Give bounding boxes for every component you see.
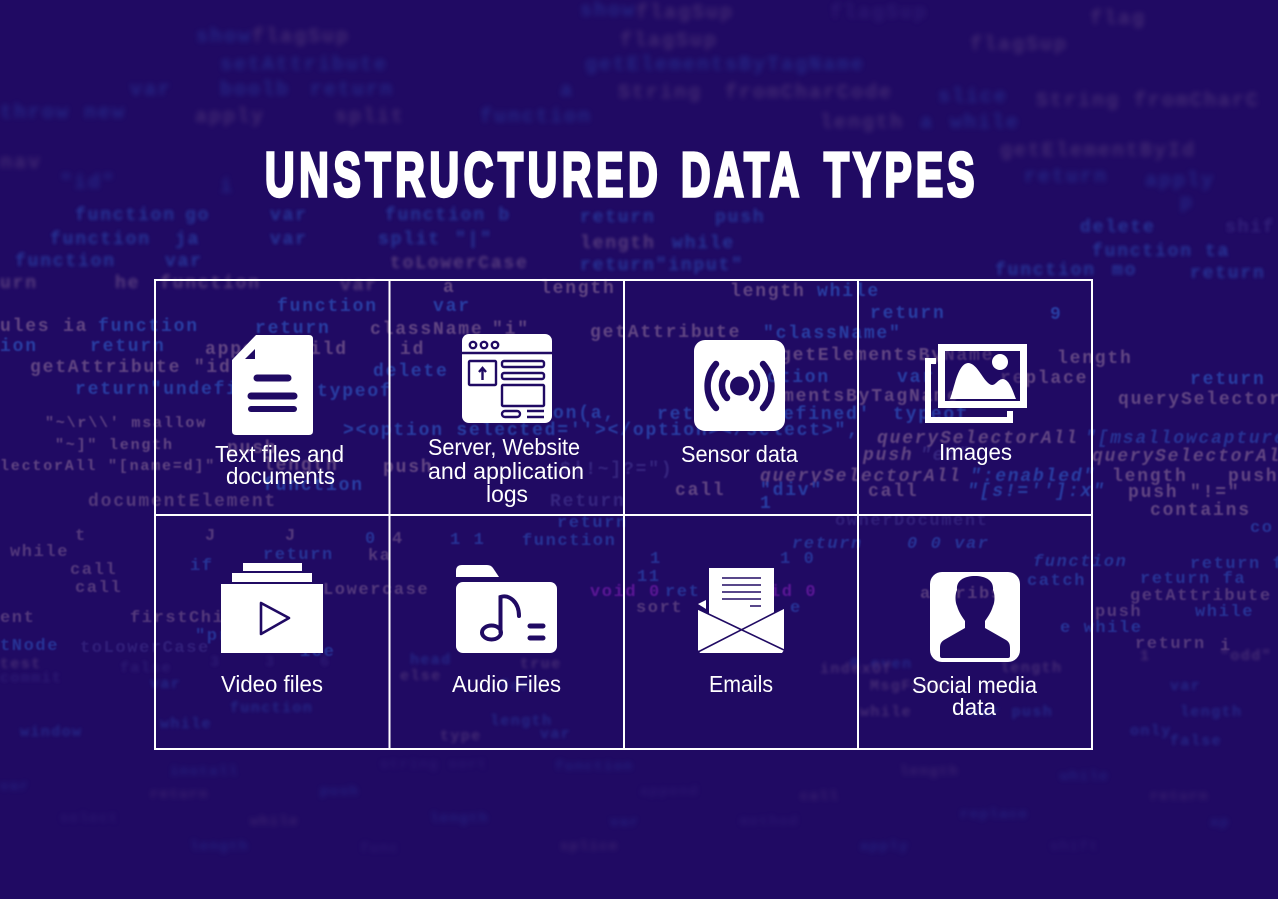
background: blurred programming code on deep purple: true <box>520 656 562 673</box>
background: blurred programming code on deep purple: var <box>540 726 571 743</box>
background: blurred programming code on deep purple: shift <box>1050 839 1099 855</box>
background: blurred programming code on deep purple: flagSup <box>636 2 734 25</box>
background: blurred programming code on deep purple: 1 0 <box>780 550 815 569</box>
background: blurred programming code on deep purple: ><option selected=''></option></select>", <box>343 421 860 441</box>
background: blurred programming code on deep purple: return <box>557 514 628 533</box>
background: blurred programming code on deep purple: function <box>1092 242 1193 262</box>
background: blurred programming code on deep purple: id <box>400 340 425 360</box>
background: blurred programming code on deep purple: return <box>310 79 394 102</box>
background: blurred programming code on deep purple: className <box>370 320 483 340</box>
background: blurred programming code on deep purple: indexOf <box>820 661 893 678</box>
background: blurred programming code on deep purple: ownerDocument <box>835 512 988 531</box>
background: blurred programming code on deep purple: a <box>920 112 934 135</box>
background: blurred programming code on deep purple: 6 <box>320 654 330 671</box>
background: blurred programming code on deep purple: delete <box>373 362 449 382</box>
background: blurred programming code on deep purple: getElementsByName <box>780 346 994 366</box>
background: blurred programming code on deep purple: var <box>1170 678 1201 695</box>
background: blurred programming code on deep purple: function <box>995 261 1096 281</box>
background: blurred programming code on deep purple: "odd" <box>1220 648 1272 665</box>
background: blurred programming code on deep purple: while <box>860 704 912 721</box>
background: blurred programming code on deep purple: false <box>120 660 172 677</box>
background: blurred programming code on deep purple: return"undefi <box>75 380 239 400</box>
background: blurred programming code on deep purple: call <box>800 789 839 805</box>
background: blurred programming code on deep purple: call <box>75 579 122 598</box>
title: UNSTRUCTURED <box>265 141 658 210</box>
cell: sensor data <box>681 340 798 467</box>
background: blurred programming code on deep purple: "id" <box>60 172 116 195</box>
background: blurred programming code on deep purple: ent <box>0 609 35 628</box>
background: blurred programming code on deep purple: push <box>1128 483 1178 503</box>
background: blurred programming code on deep purple: function b <box>385 206 511 226</box>
background: blurred programming code on deep purple: firstChi <box>130 609 224 628</box>
background: blurred programming code on deep purple: return <box>255 319 331 339</box>
background: blurred programming code on deep purple: contains <box>1150 501 1251 521</box>
background: blurred programming code on deep purple: getAttribute <box>590 323 741 343</box>
background: blurred programming code on deep purple: while <box>1060 769 1109 785</box>
background: blurred programming code on deep purple: Return <box>550 492 626 512</box>
background: blurred programming code on deep purple: on(a, <box>553 404 616 424</box>
background: blurred programming code on deep purple: while <box>10 543 69 562</box>
background: blurred programming code on deep purple: i <box>220 176 234 199</box>
background: blurred programming code on deep purple: function <box>555 759 633 775</box>
background: blurred programming code on deep purple: var <box>150 676 181 693</box>
background: blurred programming code on deep purple: length <box>580 234 656 254</box>
title: TYPES <box>824 141 974 210</box>
background: blurred programming code on deep purple: flag <box>1090 8 1146 31</box>
background: blurred programming code on deep purple: ja <box>175 230 200 250</box>
background: blurred programming code on deep purple: "ed" <box>920 446 970 466</box>
grid of eight data types <box>155 280 1092 749</box>
icon: video folder <box>221 563 323 653</box>
background: blurred programming code on deep purple: func <box>360 841 399 857</box>
background: blurred programming code on deep purple: ion <box>0 337 38 357</box>
background: blurred programming code on deep purple: ret <box>657 405 695 425</box>
background: blurred programming code on deep purple: return <box>580 208 656 228</box>
background: blurred programming code on deep purple: function <box>522 532 616 551</box>
background: blurred programming code on deep purple: go <box>185 206 210 226</box>
background: blurred programming code on deep purple: getAttribute "id" <box>30 358 244 378</box>
label <box>428 434 584 507</box>
cell: audio files <box>452 565 561 697</box>
background: blurred programming code on deep purple: function <box>1033 553 1127 572</box>
background: blurred programming code on deep purple: length <box>540 279 616 299</box>
background: blurred programming code on deep purple: 0 0 var <box>907 535 990 554</box>
background: blurred programming code on deep purple: getElementsByTagName <box>585 54 865 77</box>
label: and application <box>428 458 584 484</box>
background: blurred programming code on deep purple: push <box>227 439 277 459</box>
background: blurred programming code on deep purple: length <box>820 112 904 135</box>
background: blurred programming code on deep purple: false <box>1170 733 1222 750</box>
label: documents <box>226 463 335 489</box>
background: blurred programming code on deep purple: ules ia <box>0 317 88 337</box>
background: blurred programming code on deep purple: length <box>1180 704 1242 721</box>
background: blurred programming code on deep purple: String fromCharC <box>1036 90 1260 113</box>
background: blurred programming code on deep purple: mentsByTagName <box>783 387 959 407</box>
background: blurred programming code on deep purple: return <box>1190 370 1266 390</box>
background: blurred programming code on deep purple: getAttribute <box>1130 587 1272 606</box>
background: blurred programming code on deep purple: var <box>165 252 203 272</box>
background: blurred programming code on deep purple: var push <box>970 704 1053 721</box>
background: blurred programming code on deep purple: co <box>1250 519 1274 538</box>
background: blurred programming code on deep purple: string sort <box>380 757 488 773</box>
background: blurred programming code on deep purple: i <box>1220 637 1232 656</box>
background: blurred programming code on deep purple: length <box>1000 660 1062 677</box>
title: DATA <box>681 141 799 210</box>
background: blurred programming code on deep purple: return <box>870 304 946 324</box>
background: blurred programming code on deep purple: return <box>150 787 209 803</box>
background: blurred programming code on deep purple: querySelectorAll <box>877 429 1079 449</box>
background: blurred programming code on deep purple: toLowerCase <box>80 639 210 658</box>
background: blurred programming code on deep purple: push <box>1095 603 1142 622</box>
background: blurred programming code on deep purple: ret <box>665 583 700 602</box>
background: blurred programming code on deep purple: ild <box>310 340 348 360</box>
background: blurred programming code on deep purple: shif <box>1225 218 1275 238</box>
background: blurred programming code on deep purple: var <box>433 297 471 317</box>
background: blurred programming code on deep purple: return <box>1150 789 1209 805</box>
background: blurred programming code on deep purple: flagSup <box>830 2 928 25</box>
background: blurred programming code on deep purple: length <box>490 713 552 730</box>
background: blurred programming code on deep purple: commit <box>0 670 62 687</box>
background: blurred programming code on deep purple: length <box>263 456 339 476</box>
background: blurred programming code on deep purple: push <box>383 458 433 478</box>
label: Emails <box>709 671 773 697</box>
background: blurred programming code on deep purple: return <box>263 546 334 565</box>
background: blurred programming code on deep purple: var <box>897 368 935 388</box>
background: blurred programming code on deep purple: return <box>792 535 863 554</box>
background: blurred programming code on deep purple: function <box>50 230 151 250</box>
cell: images <box>928 348 1024 465</box>
background: blurred programming code on deep purple: return <box>1024 166 1108 189</box>
background: blurred programming code on deep purple: while <box>1195 603 1254 622</box>
background: blurred programming code on deep purple: call <box>675 481 725 501</box>
background: blurred programming code on deep purple: show <box>196 26 252 49</box>
background: blurred programming code on deep purple: ction <box>767 368 830 388</box>
cell: emails <box>698 568 784 697</box>
background: blurred programming code on deep purple: append <box>640 784 699 800</box>
background: blurred programming code on deep purple: push <box>862 446 913 466</box>
background: blurred programming code on deep purple: "[s!='']:x" <box>967 482 1106 502</box>
background: blurred programming code on deep purple: "pr" <box>195 627 242 646</box>
background: blurred programming code on deep purple: push <box>320 784 359 800</box>
background: blurred programming code on deep purple: ap <box>1210 815 1230 831</box>
background: blurred programming code on deep purple: getElementById <box>1000 140 1196 163</box>
background: blurred programming code on deep purple: J <box>205 527 217 546</box>
background: blurred programming code on deep purple: for <box>500 678 531 695</box>
background: blurred programming code on deep purple: length <box>190 839 249 855</box>
background: blurred programming code on deep purple: call <box>70 561 117 580</box>
background: blurred programming code on deep purple: mo <box>1112 261 1137 281</box>
background: blurred programming code on deep purple: he <box>115 274 140 294</box>
background: blurred programming code on deep purple: fromCharCode <box>725 82 893 105</box>
label <box>215 441 344 489</box>
icon: browser window <box>462 334 552 423</box>
background: blurred programming code on deep purple: 4 <box>392 530 404 549</box>
icon: music folder <box>456 565 557 653</box>
background: blurred programming code on deep purple: head <box>410 652 452 669</box>
icon: person portrait <box>930 572 1020 662</box>
background: blurred programming code on deep purple: urn <box>0 274 38 294</box>
background: blurred programming code on deep purple: replace <box>960 807 1029 823</box>
label: Social media <box>912 672 1037 698</box>
background: blurred programming code on deep purple: show <box>580 0 636 23</box>
background: blurred programming code on deep purple: call <box>868 482 918 502</box>
background: blurred programming code on deep purple: t <box>75 527 87 546</box>
background: blurred programming code on deep purple: flagSup <box>620 30 718 53</box>
background: blurred programming code on deep purple: return <box>90 337 166 357</box>
cell: social media data <box>912 572 1037 720</box>
background: blurred programming code on deep purple: apply <box>1145 170 1215 193</box>
label: Video files <box>221 671 323 697</box>
background: blurred programming code on deep purple: function <box>160 274 261 294</box>
background: blurred programming code on deep purple: efined' <box>783 405 871 425</box>
background: blurred programming code on deep purple: var <box>0 779 29 795</box>
background: blurred programming code on deep purple: while <box>817 282 880 302</box>
background: blurred programming code on deep purple: function <box>263 476 364 496</box>
title <box>265 141 974 210</box>
background: blurred programming code on deep purple: length <box>900 764 959 780</box>
background: blurred programming code on deep purple: a <box>443 278 456 298</box>
background: blurred programming code on deep purple: "~\r\\' msallow <box>45 415 207 432</box>
background: blurred programming code on deep purple: install <box>170 764 239 780</box>
background: blurred programming code on deep purple: nav <box>0 152 42 175</box>
background: blurred programming code on deep purple: function <box>480 106 592 129</box>
background: blurred programming code on deep purple: length <box>1112 467 1188 487</box>
background: blurred programming code on deep purple: return"input" <box>580 256 744 276</box>
background: blurred programming code on deep purple: typeof <box>317 382 393 402</box>
background: blurred programming code on deep purple: e while <box>1060 619 1143 638</box>
background: blurred programming code on deep purple: append <box>205 340 281 360</box>
background: blurred programming code on deep purple: test <box>0 656 42 673</box>
background: blurred programming code on deep purple: MsgFormat <box>870 678 964 695</box>
background: blurred programming code on deep purple: throw new <box>0 102 126 125</box>
background: blurred programming code on deep purple: function <box>75 206 176 226</box>
background: blurred programming code on deep purple: while <box>250 814 299 830</box>
background: blurred programming code on deep purple: delete <box>1080 218 1156 238</box>
background: blurred programming code on deep purple: var <box>610 815 639 831</box>
background: blurred programming code on deep purple: ka <box>368 547 392 566</box>
background: blurred programming code on deep purple: querySelector <box>1118 390 1278 410</box>
background: blurred programming code on deep purple: window <box>20 724 82 741</box>
background: blurred programming code on deep purple: var <box>270 230 308 250</box>
background: blurred programming code on deep purple: push <box>715 208 765 228</box>
background: blurred programming code on deep purple: type <box>440 728 482 745</box>
cell: video files <box>221 563 323 697</box>
background: blurred programming code on deep purple: "i" <box>492 320 530 340</box>
label: Server, Website <box>428 434 580 460</box>
background: blurred programming code on deep purple: 1 <box>650 550 662 569</box>
label: logs <box>486 481 528 507</box>
background: blurred programming code on deep purple: 0 <box>365 530 377 549</box>
background: blurred programming code on deep purple: length <box>730 282 806 302</box>
background: blurred programming code on deep purple: length <box>430 811 489 827</box>
background: blurred programming code on deep purple: function <box>98 317 199 337</box>
background: blurred programming code on deep purple: attribs <box>920 585 1003 604</box>
background: blurred programming code on deep purple: "|" <box>455 230 493 250</box>
background: blurred programming code on deep purple: replace <box>1000 369 1088 389</box>
background: blurred programming code on deep purple: while <box>160 716 212 733</box>
background: blurred programming code on deep purple: toLowerCase <box>390 254 529 274</box>
background: blurred programming code on deep purple: split <box>378 230 441 250</box>
background: blurred programming code on deep purple: function <box>15 252 116 272</box>
background: blurred programming code on deep purple: 1 <box>760 494 773 514</box>
background: blurred programming code on deep purple: "div" <box>760 481 823 501</box>
cell: server, website and application logs <box>428 334 584 507</box>
background: blurred programming code on deep purple: boolb <box>220 79 290 102</box>
background: blurred programming code on deep purple: sort <box>636 599 683 618</box>
background: blurred programming code on deep purple: Lowercase <box>323 581 429 600</box>
background: blurred programming code on deep purple: return fa <box>1140 570 1246 589</box>
background: blurred programming code on deep purple: 3 <box>265 654 275 671</box>
label: data <box>952 694 996 720</box>
background: blurred programming code on deep purple: if <box>190 557 214 576</box>
background: blurred programming code on deep purple: var <box>130 79 172 102</box>
background: blurred programming code on deep purple: while <box>672 234 735 254</box>
background: blurred programming code on deep purple: ice <box>300 643 335 662</box>
background: blurred programming code on deep purple: 1 <box>1140 648 1150 665</box>
background: blurred programming code on deep purple: return <box>1190 264 1266 284</box>
background: blurred programming code on deep purple: J <box>285 527 297 546</box>
background: blurred programming code on deep purple: 1 1 <box>450 531 485 550</box>
background: blurred programming code on deep purple: querySelectorAll <box>760 467 962 487</box>
icon: sensor signal <box>694 340 785 431</box>
background: blurred programming code on deep purple: select <box>60 811 119 827</box>
label: Audio Files <box>452 671 561 697</box>
background: blurred programming code on deep purple: length <box>1057 349 1133 369</box>
icon: document <box>232 335 313 435</box>
label <box>912 672 1037 720</box>
background: blurred programming code on deep purple: slice <box>938 86 1008 109</box>
background: blurred programming code on deep purple: return <box>1135 635 1206 654</box>
background: blurred programming code on deep purple: e <box>790 599 802 618</box>
label: Sensor data <box>681 441 798 467</box>
background: blurred programming code on deep purple: tNode <box>0 637 59 656</box>
cell: text files and documents <box>215 335 344 489</box>
label: Images <box>939 439 1012 465</box>
background: blurred programming code on deep purple: p <box>1180 192 1194 215</box>
background: blurred programming code on deep purple: split <box>335 106 405 129</box>
background: blurred programming code on deep purple: while <box>950 112 1020 135</box>
background: blurred programming code on deep purple: 0 even <box>850 656 912 673</box>
background: blurred programming code on deep purple: flagSup <box>252 26 350 49</box>
background: blurred programming code on deep purple: function <box>230 700 313 717</box>
background: blurred programming code on deep purple: method <box>740 814 799 830</box>
background: blurred programming code on deep purple: function <box>277 297 378 317</box>
label: Text files and <box>215 441 344 467</box>
background: blurred programming code on deep purple: id 0 <box>770 583 817 602</box>
background: blurred programming code on deep purple: String <box>618 82 702 105</box>
background: blurred programming code on deep purple: catch <box>1027 572 1086 591</box>
background: blurred programming code on deep purple: typeof <box>893 405 969 425</box>
background: blurred programming code on deep purple: push <box>1228 467 1278 487</box>
background: blurred programming code on deep purple: lectorAll "[name=d]" <box>0 458 216 475</box>
background: blurred programming code on deep purple: var <box>270 206 308 226</box>
background: blurred programming code on deep purple: ta <box>1205 242 1230 262</box>
background: blurred programming code on deep purple: apply <box>860 839 909 855</box>
background: blurred programming code on deep purple: apply <box>195 106 265 129</box>
background: blurred programming code on deep purple: 9 <box>1050 305 1063 325</box>
background: blurred programming code on deep purple: ":enabled" <box>970 467 1096 487</box>
background: blurred programming code on deep purple: "className" <box>763 324 902 344</box>
icon: open envelope <box>698 568 784 653</box>
background: blurred programming code on deep purple: splice <box>560 839 619 855</box>
background: blurred programming code on deep purple: $|!~]?=") <box>560 460 673 480</box>
background: blurred programming code on deep purple: "~]" length <box>55 437 174 454</box>
background: blurred programming code on deep purple: flagSup <box>970 34 1068 57</box>
background: blurred programming code on deep purple: 3 <box>210 654 220 671</box>
background: blurred programming code on deep purple: "!=" <box>1190 483 1240 503</box>
background: blurred programming code on deep purple: 11 <box>637 568 661 587</box>
background: blurred programming code on deep purple: only <box>1130 723 1172 740</box>
background: blurred programming code on deep purple: else <box>400 668 442 685</box>
background: blurred programming code on deep purple: documentElement <box>88 492 277 512</box>
background: blurred programming code on deep purple: void 0 <box>590 583 661 602</box>
background: blurred programming code on deep purple: var <box>340 276 378 296</box>
icon: stacked photos <box>928 348 1024 420</box>
background: blurred programming code on deep purple: a <box>560 80 574 103</box>
background: blurred programming code on deep purple: setAttribute <box>220 54 388 77</box>
